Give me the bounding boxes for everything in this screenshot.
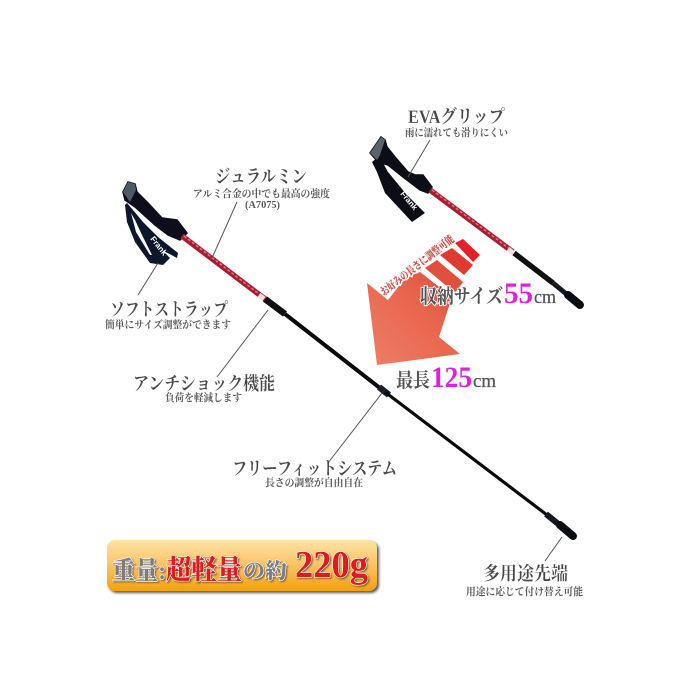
label: max length 125cm: cm [473,371,496,392]
weight text: 超軽量 [166,555,242,585]
weight badge [107,540,377,591]
long trekking pole [123,182,573,536]
callout: duralumin: (A7075) [245,200,280,211]
label: stowed size 55cm: 収納サイズ [420,285,503,308]
weight text [112,544,368,586]
callout: free fit system: フリーフィットシステム [232,460,397,480]
callout: soft strap: ソフトストラップ [110,300,228,321]
long pole tip [546,514,573,536]
label: stowed size 55cm [420,277,556,310]
label: max length 125cm: 125 [431,361,472,394]
long pole strap: Frank [148,235,169,258]
short pole strap: Frank [398,190,420,212]
callout: anti-shock [133,310,275,404]
short pole red shaft [430,190,513,253]
long pole grip [123,182,187,240]
label: stowed size 55cm: 55 [504,277,533,310]
callout: multi-use tip: 用途に応じて付け替え可能 [466,585,583,598]
short pole grip [370,137,432,193]
callout: anti-shock: アンチショック機能 [133,374,275,395]
callout: duralumin: アルミ合金の中でも最高の強度 [193,187,330,200]
callout: EVA grip: EVAグリップ [408,107,505,128]
callout: soft strap: 簡単にサイズ調整ができます [105,318,231,331]
arrow label: お好みの長さに調整可能 [377,232,457,298]
label: stowed size 55cm: cm [534,287,556,308]
long pole strap [125,203,178,265]
short pole strap [372,158,425,222]
label: max length 125cm: 最長 [396,369,430,392]
callout: free fit system: 長さの調整が自由自在 [265,476,363,489]
weight text: 重量: [112,557,166,585]
weight text: の約 [243,559,287,583]
callout: EVA grip: 雨に濡れても滑りにくい [405,126,508,139]
short pole black shaft and tip [514,253,580,305]
callout: anti-shock: 負荷を軽減します [165,391,242,404]
arrow: extendable length [367,232,480,365]
callout: EVA grip [405,107,508,177]
short trekking pole [370,137,580,305]
weight text: 220g [295,544,368,586]
callout: multi-use tip [466,537,583,598]
callout: free fit system [232,393,397,489]
callout: duralumin: ジュラルミン [215,167,307,188]
callout: soft strap [105,263,231,331]
long pole black shaft [265,299,547,515]
callout: multi-use tip: 多用途先端 [483,563,568,585]
long pole red shaft [182,236,265,299]
callout: duralumin [193,167,330,258]
label: max length 125cm [396,361,496,394]
